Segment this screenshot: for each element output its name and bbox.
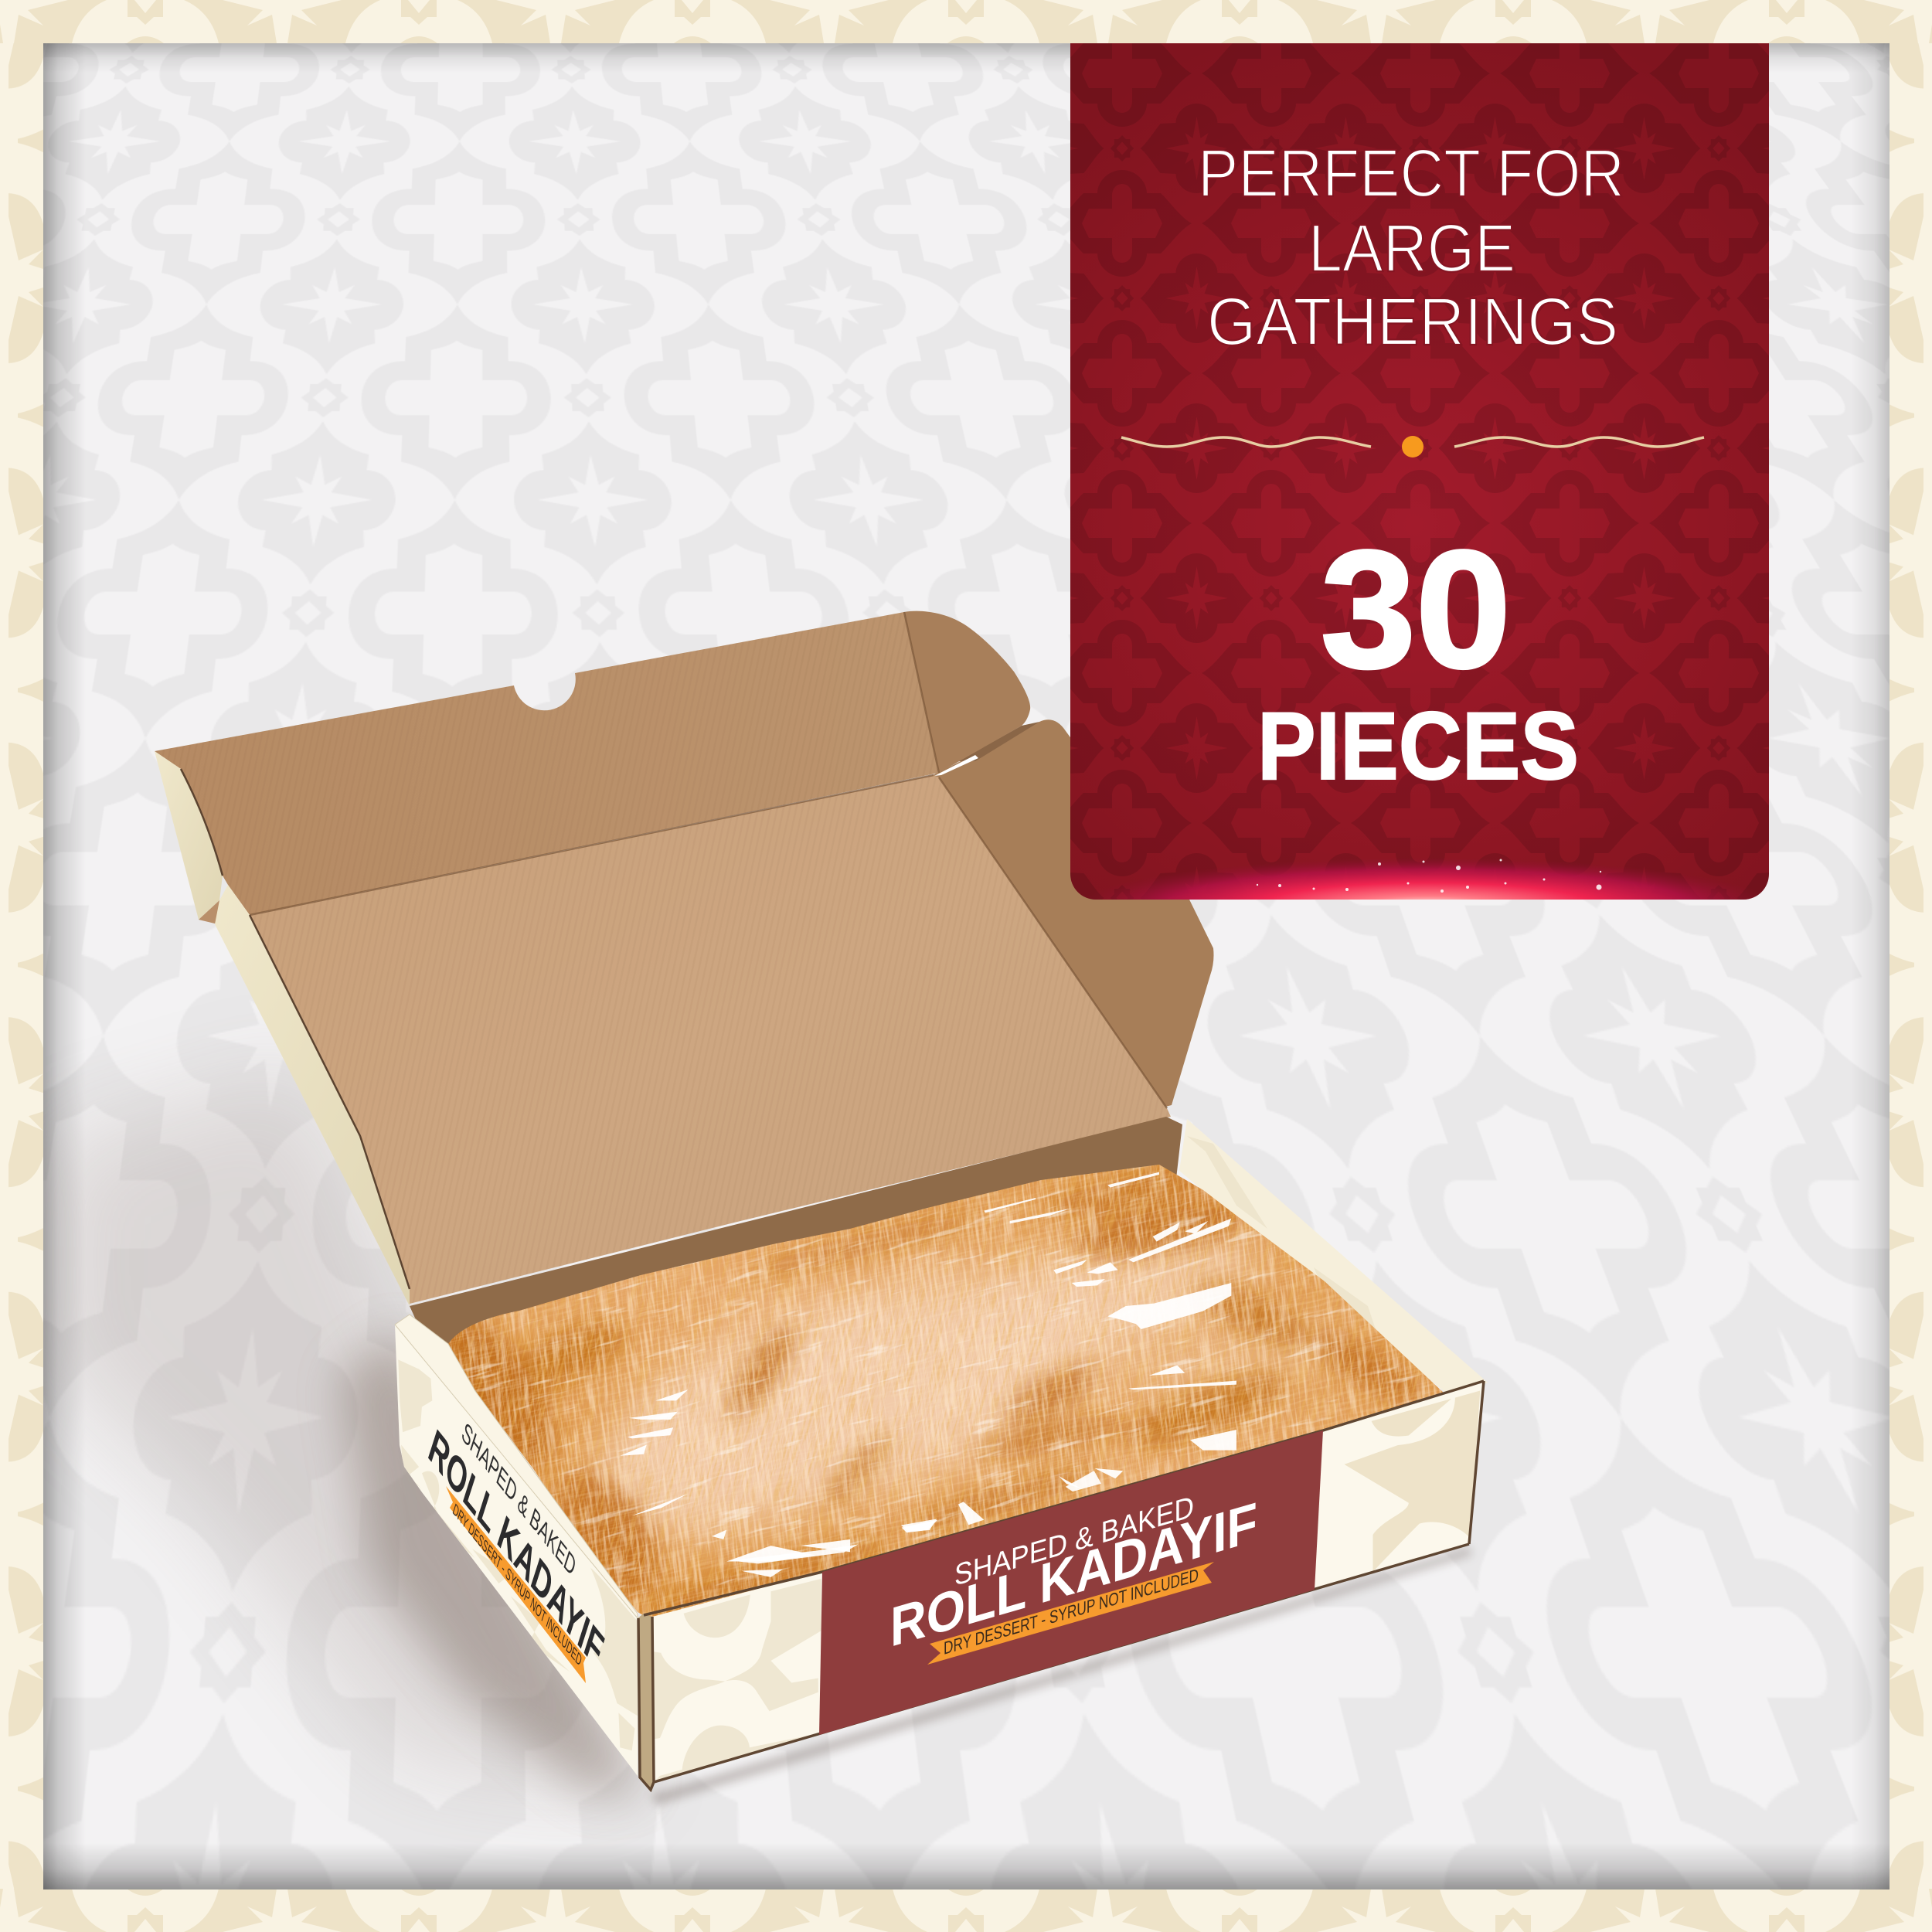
- box: back inner wall: [410, 1117, 1182, 1352]
- panel heading: LARGE: [1308, 211, 1515, 286]
- box: edges: [638, 1381, 1484, 1790]
- front label text: dry dessert: DRY DESSERT - SYRUP NOT INCLUDED: [944, 1565, 1199, 1658]
- left wall text: shaped and baked: SHAPED & BAKED: [459, 1416, 579, 1583]
- lid: upper kraft panel with thumb notch: [155, 612, 939, 915]
- lid: gap shade between tabs: [958, 722, 1039, 761]
- food: plastic wrap highlights, upper right: [902, 1172, 1236, 1532]
- food: plastic glints: [464, 1167, 1441, 1607]
- left wall text: roll kadayif: ROLL KADAYIF: [423, 1419, 608, 1678]
- front label ribbon: [927, 1562, 1214, 1665]
- food: pale centre: [560, 1203, 1356, 1574]
- front label text: roll kadayif: ROLL KADAYIF: [890, 1490, 1257, 1659]
- box: left outer wall: [395, 1325, 638, 1776]
- divider dot: [1402, 436, 1423, 457]
- box: right inner wall: [1179, 1119, 1488, 1395]
- panel heading: PERFECT FOR: [1198, 136, 1624, 211]
- panel tile pattern: [1070, 43, 1769, 900]
- lid: main kraft panel: [250, 775, 1171, 1304]
- box: left wall inner lip: [395, 1315, 638, 1618]
- box: corrugated corner: [638, 1614, 654, 1790]
- baklava food block: [448, 1165, 1444, 1617]
- divider wave left: [1121, 437, 1371, 447]
- box: right inner wall pattern: [1187, 1136, 1383, 1352]
- lid: dark edge line: [181, 769, 410, 1289]
- panel bottom glow: [1080, 858, 1775, 954]
- panel background: [1070, 43, 1769, 900]
- food: golden brown patches: [414, 1157, 1430, 1622]
- word pieces: PIECES: [1257, 693, 1579, 800]
- panel heading: GATHERINGS: [1207, 284, 1618, 359]
- box with open lid: [155, 611, 1728, 1792]
- lid: cream edge upper: [155, 751, 223, 920]
- lid: small fold: [199, 900, 219, 924]
- food: plastic wrap highlights, left: [620, 1389, 850, 1577]
- panel: perfect for large gatherings: [1070, 43, 1775, 954]
- number 30: 30: [1321, 515, 1511, 702]
- left wall ribbon: [446, 1486, 586, 1683]
- front label text: shaped and baked: SHAPED & BAKED: [954, 1490, 1194, 1593]
- box: left wall pattern: [398, 1359, 638, 1750]
- box: front wall pattern: [651, 1391, 1480, 1782]
- glow sparkles: [1257, 859, 1601, 893]
- lid: gap highlight: [934, 755, 978, 776]
- food: plastic wrap highlights, rim and right: [730, 1471, 1101, 1563]
- box shadow on the surface: [46, 1066, 1472, 1805]
- divider wave right: [1454, 437, 1704, 447]
- lid: corrugation ribs: [155, 612, 1171, 1304]
- box with open lid: DRY DESSERT - SYRUP NOT INCLUDED: [451, 1500, 583, 1670]
- lid: upper right tab: [904, 611, 1030, 773]
- lid: hinge crease: [250, 612, 1167, 1108]
- lid: right side tab: [931, 719, 1213, 1108]
- box: front wall: [652, 1381, 1484, 1782]
- lid: cream edge lower: [215, 885, 410, 1306]
- panel heading: [1198, 136, 1624, 359]
- food: fine strands: [450, 1165, 1442, 1617]
- front label panel: [819, 1430, 1323, 1735]
